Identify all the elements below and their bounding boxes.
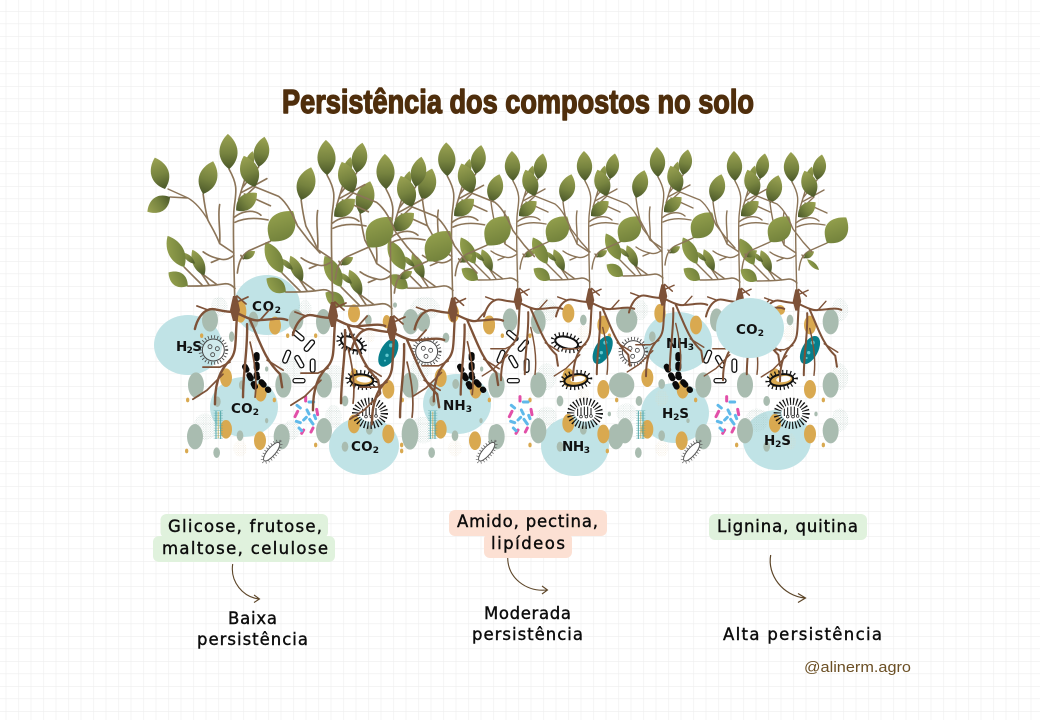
far-left leaves of the first plant [143,155,208,220]
chemical labels: 2 [253,408,259,418]
pill: lignin [709,514,867,540]
chemical labels: H [176,339,187,355]
group 2: moderate persistence [449,510,607,644]
label [197,609,308,649]
CO2 bubble over the roots: 2 [758,329,764,339]
label: Alta persistência [723,625,882,644]
label: Moderada [484,604,571,623]
title: Persistência dos compostos no solo [282,83,754,120]
pill: starch: Amido, pectina, [457,512,598,531]
group 1: low persistence [153,514,335,649]
chemical labels: H [662,406,673,422]
chemical labels: NH [443,398,466,414]
chemical labels: CO [231,401,253,417]
microbes, right part [496,330,824,465]
chemical labels [176,299,791,456]
arrow [232,564,260,602]
pill: sugars: maltose, celulose [162,539,328,558]
pill: sugars [153,514,335,562]
pill: lignin: Lignina, quitina [717,517,858,536]
label: persistência [472,625,583,644]
chemical labels: H [764,433,775,449]
label: Baixa [228,609,277,628]
chemical labels: NH [562,439,584,455]
chemical labels: 3 [466,405,472,415]
CO2 bubble over the roots [716,298,784,358]
plants [143,134,855,424]
chemical labels: 2 [275,306,281,316]
pill: starch: lipídeos [491,534,565,553]
chemical labels: S [781,433,791,449]
gas bubbles [154,275,811,476]
group 3: high persistence [709,514,882,644]
chemical labels: CO [351,439,373,455]
microbes, left part [200,330,499,465]
label: persistência [197,630,308,649]
pill: starch [449,510,607,558]
chemical labels: NH [666,336,688,352]
chemical labels: S [679,406,689,422]
soil particles, right part [485,298,848,458]
chemical labels: 2 [187,346,193,356]
chemical labels: S [192,339,202,355]
credit: @alinerm.agro [804,659,911,676]
chemical labels: 3 [688,343,694,353]
chemical labels: CO [252,299,274,315]
label [472,604,583,644]
arrow [508,558,548,594]
pill: sugars: Glicose, frutose, [168,517,322,536]
chemical labels: 2 [775,440,781,450]
chemical labels: 3 [584,446,590,456]
soil particles, left part [185,297,502,458]
arrow [770,555,806,602]
chemical labels: 2 [673,413,679,423]
chemical labels: 2 [373,446,379,456]
illustration: soil with plants, roots and microbes [143,134,855,476]
CO2 bubble over the roots: CO [736,322,758,338]
